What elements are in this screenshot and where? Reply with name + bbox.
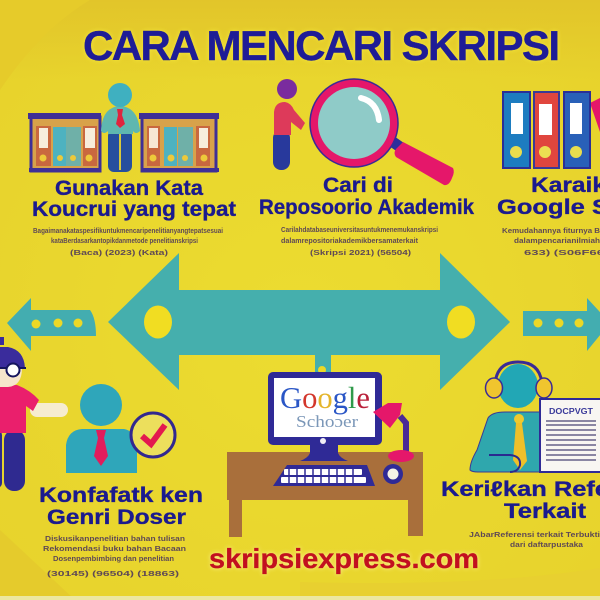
icon: magnifying glass [310, 79, 454, 185]
panel: konsultasikan dosen: Genri Doser [47, 506, 186, 529]
text block: Carilahdatabaseuniversitasuntukmenemukanskripsi [281, 225, 438, 234]
icon: desk [227, 452, 423, 537]
text block: Rekomendasi buku bahan Bacaan [43, 544, 186, 553]
icon: right bookshelf [139, 113, 219, 172]
heading: Keriℓkan Refe [441, 478, 600, 501]
panel: periksa referensi [441, 362, 600, 549]
icon: document: DOCPVGT [549, 407, 593, 416]
panel: desk with computer [227, 372, 423, 537]
text block: Diskusikanpenelitian bahan tulisan [45, 534, 185, 543]
title: CARA MENCARI SKRIPSI [83, 22, 560, 69]
heading: Cari di [323, 174, 393, 197]
text block [469, 530, 600, 549]
panel: google scholar [497, 92, 600, 257]
text block: dari daftarpustaka [510, 540, 584, 549]
panel: kata kunci: Koucrui yang tepat [32, 198, 236, 221]
icon: document [540, 399, 600, 472]
panel: repositori akademik: Reposoorio Akademik [259, 196, 474, 219]
text block: (Skripsi 2021) (56504) [310, 248, 412, 257]
text block: Kemudahannya fiturnya B [502, 226, 600, 235]
text block: Dosenpembimbing dan penelitian [53, 554, 174, 563]
website url: skripsiexpress.com [209, 543, 479, 574]
heading: Karaik [531, 174, 600, 197]
text block: JAbarReferensi terkait Terbukti [469, 530, 600, 539]
arrow: small right arrow [523, 298, 600, 351]
text block: 633) (S06F66 [524, 248, 600, 257]
icon: keyboard [273, 465, 375, 486]
scholar text: Schoɔer [296, 412, 358, 431]
icon: desk lamp [373, 403, 414, 462]
panel: repositori akademik [259, 79, 474, 257]
icon: person with tie [101, 83, 140, 172]
text block: dalamrepositoriakademikbersamaterkait [281, 236, 418, 245]
icon: left bookshelf [28, 113, 101, 172]
panel: google scholar: Google S [497, 196, 600, 219]
text block: (30145) (96504) (18863) [47, 569, 180, 578]
panel: kata kunci [28, 83, 236, 257]
heading: Gunakan Kata [55, 177, 203, 200]
text block [502, 226, 600, 257]
icon: monitor [268, 372, 382, 461]
arrow: small left arrow [7, 298, 96, 351]
google logo text: Google [280, 380, 370, 415]
text block [43, 534, 186, 578]
arrow: large double arrow [108, 253, 510, 390]
icon: binders [503, 92, 600, 168]
heading: Konfafatk ken [39, 484, 203, 507]
text block [281, 225, 438, 257]
text block: dalampencarianilmiah [514, 236, 600, 245]
icon: person with headphones [470, 362, 552, 472]
icon: person [273, 79, 305, 170]
panel: konsultasikan dosen [0, 337, 203, 578]
text block: (Baca) (2023) (Kata) [70, 248, 169, 257]
panel: periksa referensi: Terkait [504, 500, 586, 523]
text block: kataBerdasarkantopikdanmetode penelitianskripsi [51, 236, 198, 245]
website url: skripsiexpress.com [209, 543, 479, 574]
icon: teal person [66, 384, 137, 473]
title: CARA MENCARI SKRIPSI [83, 22, 560, 69]
icon: check badge [131, 413, 175, 457]
text block: Bagaimanakataspesifikuntukmencaripenelitianyangtepatsesuai [33, 226, 223, 235]
icon: mouse [383, 464, 403, 484]
text block [33, 226, 223, 257]
icon: person with glasses [0, 337, 68, 491]
connector stem [315, 355, 331, 375]
